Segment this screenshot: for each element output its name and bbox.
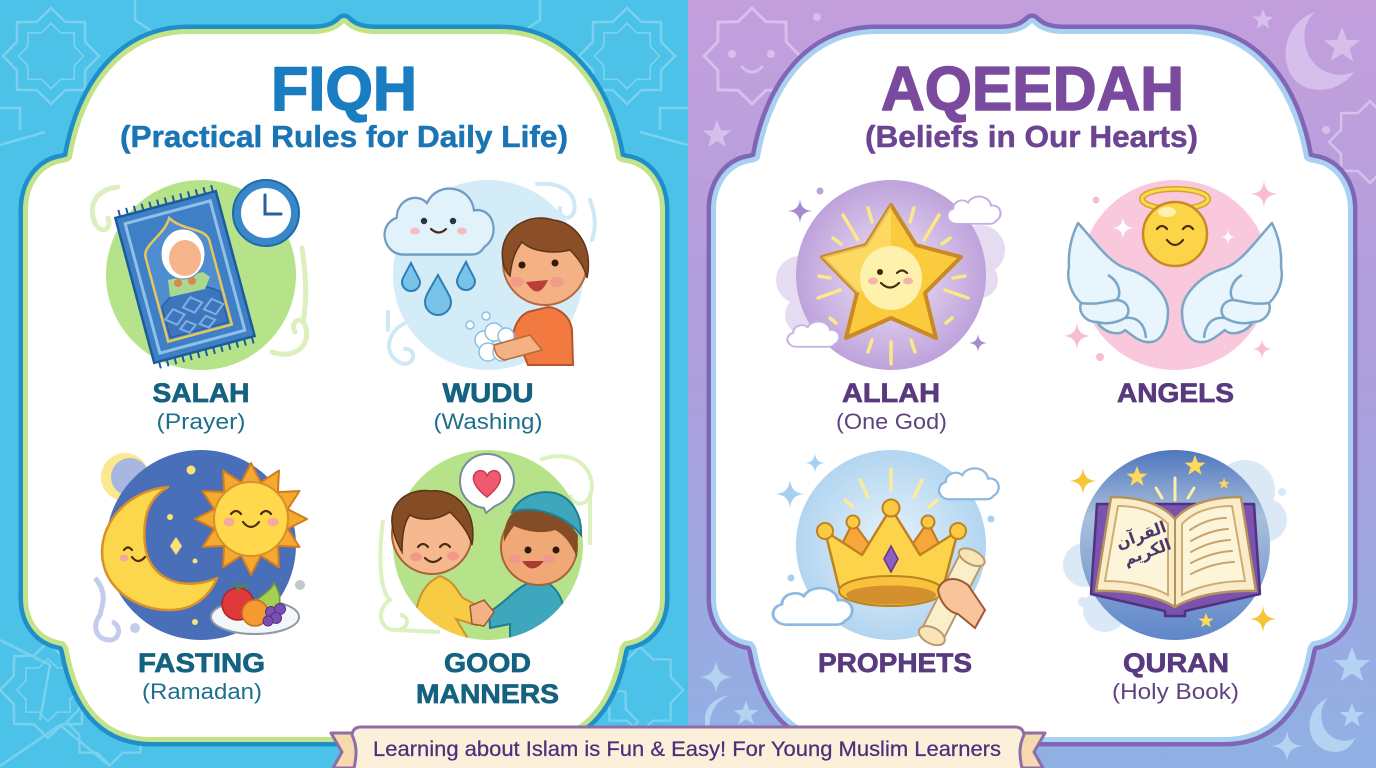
icon: quran open book (1063, 450, 1287, 640)
heading: AQEEDAH: AQEEDAH (881, 55, 1184, 124)
label: prophets: PROPHETS (818, 648, 972, 678)
subheading: aqeedah: (Beliefs in Our Hearts) (865, 119, 1198, 154)
icon: salah prayer rug and clock (92, 180, 307, 370)
sublabel: prayer: (Prayer) (156, 409, 246, 434)
icon: allah shining star (776, 180, 1005, 370)
label: allah: ALLAH (842, 378, 940, 408)
subheading: fiqh: (Practical Rules for Daily Life) (120, 119, 568, 154)
calligraphy: quran on page: القرآن (1113, 516, 1169, 553)
label: good manners: MANNERS (416, 679, 559, 709)
label: good manners (416, 648, 559, 709)
calligraphy: quran on page: الكريم (1121, 535, 1174, 569)
label: angels: ANGELS (1117, 378, 1234, 408)
label: wudu: WUDU (442, 378, 534, 408)
icon: prophets crown and scroll (773, 450, 999, 649)
icon: wudu cloud and boy washing (385, 180, 595, 370)
icon: good manners two boys shaking hands (380, 450, 592, 642)
calligraphy: quran on page (1113, 516, 1175, 570)
sublabel: washing: (Washing) (434, 409, 542, 434)
sublabel: one god: (One God) (836, 409, 947, 434)
label: quran: QURAN (1123, 648, 1229, 678)
panel: fiqh (28, 23, 660, 737)
label: fasting: FASTING (138, 648, 265, 678)
sublabel: holy book: (Holy Book) (1112, 679, 1239, 704)
footer ribbon banner (331, 727, 1045, 768)
footer text: Learning about Islam is Fun & Easy! For Young Muslim Learners (373, 738, 1001, 761)
icon: angels halo and wings (1064, 180, 1282, 370)
heading: FIQH: FIQH (271, 55, 417, 124)
icon: fasting moon sun and fruit (95, 450, 307, 640)
background: aqeedah side (688, 0, 1376, 768)
background: fiqh side (0, 0, 688, 768)
label: salah: SALAH (152, 378, 250, 408)
label: good manners: GOOD (444, 648, 531, 678)
sublabel: ramadan: (Ramadan) (142, 679, 262, 704)
panel: aqeedah (716, 23, 1348, 737)
